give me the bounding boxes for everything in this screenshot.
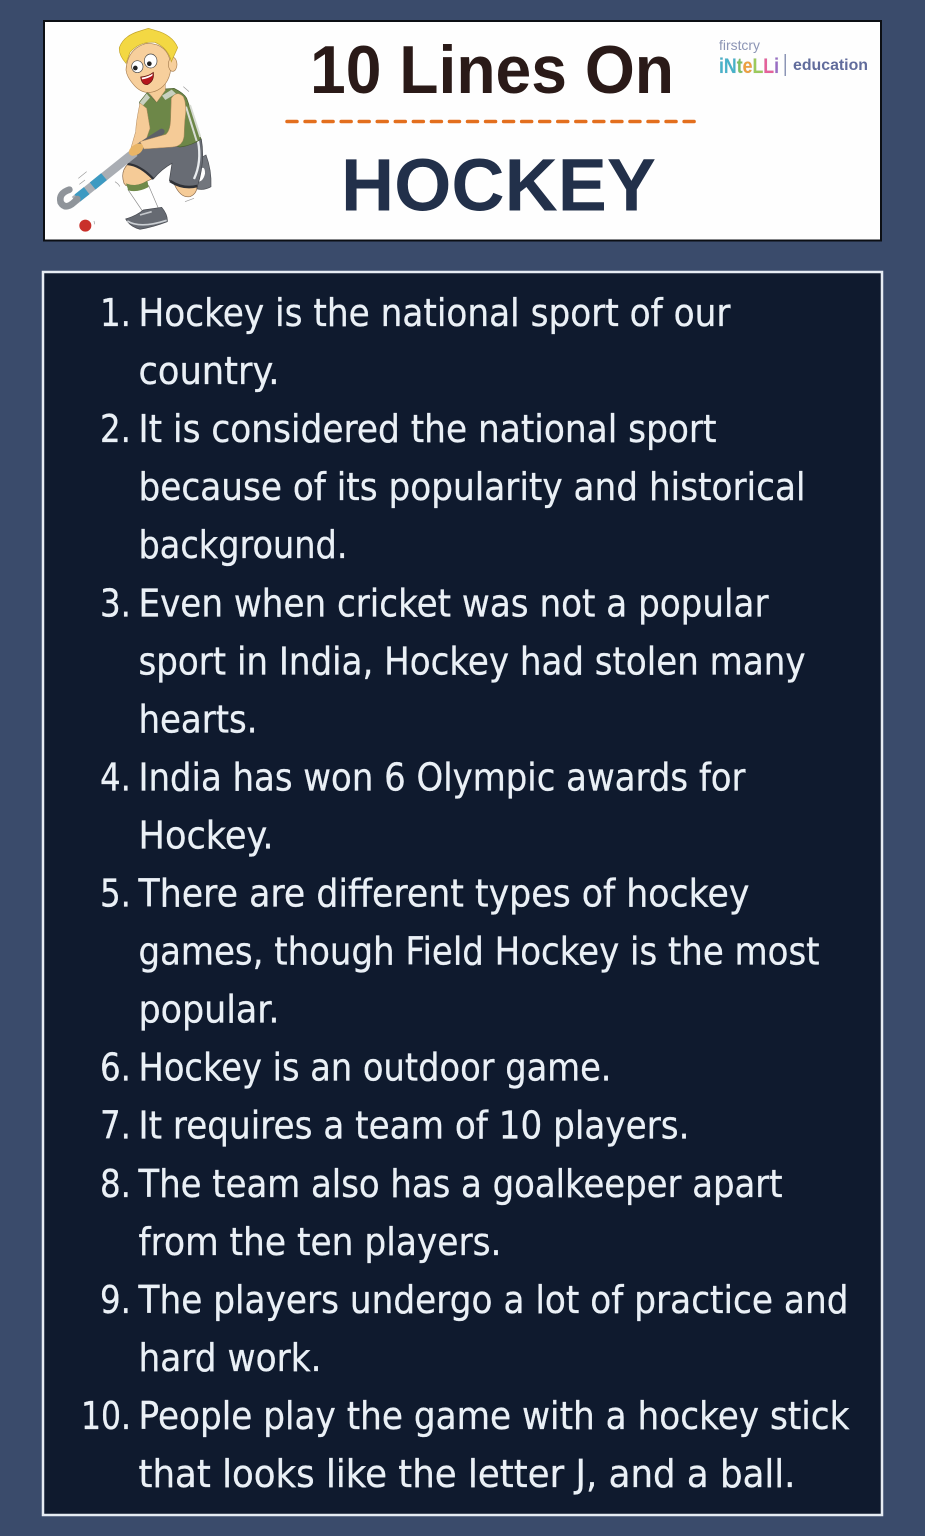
hand	[127, 141, 145, 158]
head	[126, 43, 171, 92]
logo: firstcry intelli education: iNteLLi	[719, 55, 779, 78]
front leg	[123, 164, 153, 186]
item 2	[100, 407, 806, 567]
panel: ten lines list	[43, 272, 882, 1515]
heading: 10 Lines On: 10 Lines On	[310, 32, 674, 108]
item 3: Even when cricket was not a popular	[138, 581, 769, 625]
item 8: 8.	[100, 1162, 131, 1206]
item 8: from the ten players.	[138, 1220, 502, 1264]
panel: header	[44, 21, 881, 240]
item 4: 4.	[100, 755, 131, 799]
motion marks	[78, 87, 194, 224]
item 4: India has won 6 Olympic awards for	[138, 755, 746, 799]
item 6: Hockey is an outdoor game.	[138, 1046, 612, 1090]
dashed orange divider	[287, 120, 696, 123]
item 7: 7.	[100, 1104, 131, 1148]
item 10	[81, 1394, 850, 1496]
eyes	[132, 61, 143, 73]
item 9: 9.	[100, 1278, 131, 1322]
item 1: Hockey is the national sport of our	[138, 291, 731, 335]
item 10: 10.	[81, 1394, 131, 1438]
item 2: It is considered the national sport	[138, 407, 716, 451]
logo: firstcry intelli education: firstcry	[719, 37, 760, 53]
item 8: The team also has a goalkeeper apart	[138, 1162, 782, 1206]
left arm	[131, 103, 150, 149]
item 4	[100, 755, 746, 857]
item 3: 3.	[100, 581, 131, 625]
item 1: country.	[138, 349, 280, 393]
item 9	[100, 1278, 848, 1380]
item 3: hearts.	[138, 697, 258, 741]
item 1: 1.	[100, 291, 131, 335]
item 4: Hockey.	[138, 813, 274, 857]
item 8	[100, 1162, 782, 1264]
heading: HOCKEY: HOCKEY	[341, 144, 656, 226]
shorts	[127, 139, 203, 188]
back knee	[174, 184, 197, 197]
item 5	[100, 872, 820, 1032]
item 3	[100, 581, 806, 741]
stick grip	[138, 132, 162, 147]
white sock	[128, 186, 159, 212]
item 5: games, though Field Hockey is the most	[138, 930, 820, 974]
item 5: 5.	[100, 872, 131, 916]
right arm	[140, 94, 186, 149]
item 2: background.	[138, 523, 348, 567]
item 5: There are different types of hockey	[138, 872, 750, 916]
mouth	[141, 72, 154, 85]
item 7: It requires a team of 10 players.	[138, 1104, 690, 1148]
item 10: People play the game with a hockey stick	[138, 1394, 850, 1438]
item 3: sport in India, Hockey had stolen many	[138, 639, 806, 683]
item 2: because of its popularity and historical	[138, 465, 806, 509]
item 5: popular.	[138, 988, 280, 1032]
neck	[149, 83, 165, 102]
item 10: that looks like the letter J, and a ball.	[138, 1452, 796, 1496]
icon: hockey player boy	[60, 28, 211, 232]
item 6: 6.	[100, 1046, 131, 1090]
item 2: 2.	[100, 407, 131, 451]
item 9: hard work.	[138, 1336, 322, 1380]
stick	[75, 152, 135, 200]
back foot	[196, 155, 211, 189]
logo: firstcry intelli education	[719, 37, 868, 78]
item 1	[100, 291, 731, 393]
item 9: The players undergo a lot of practice and	[138, 1278, 848, 1322]
shoe	[126, 207, 167, 229]
shirt	[139, 88, 201, 147]
ball	[79, 220, 91, 232]
logo: firstcry intelli education: education	[793, 57, 868, 74]
hair	[119, 28, 178, 63]
